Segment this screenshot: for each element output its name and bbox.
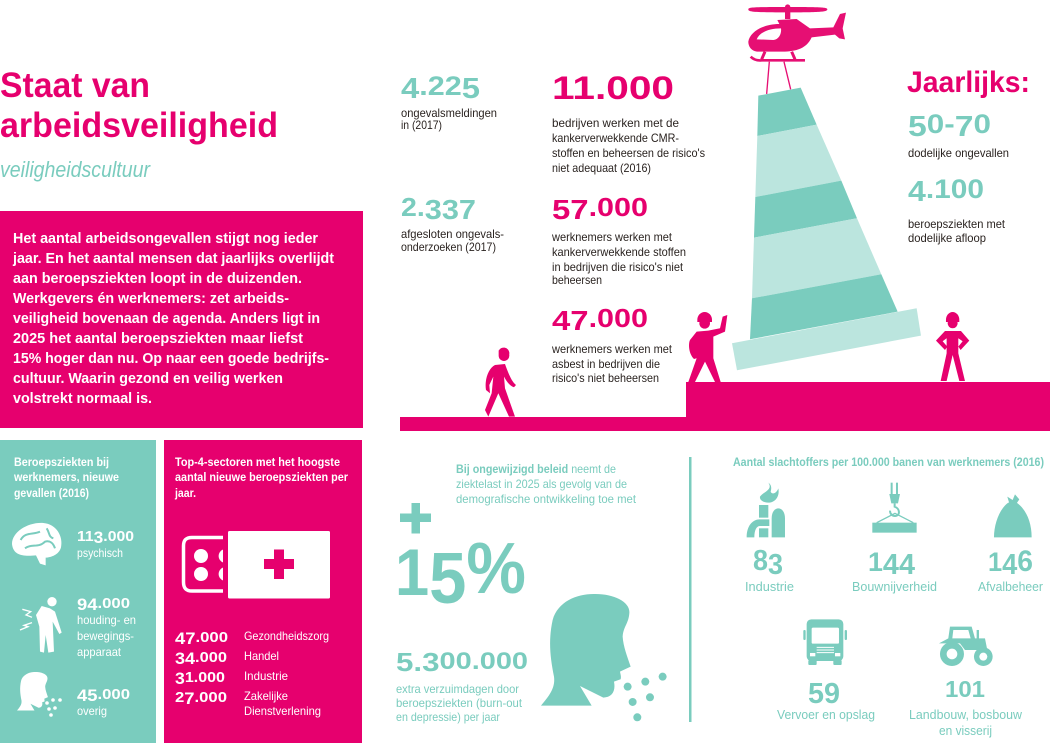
stat: houding- en bewegingsapparaat: .000 bbox=[97, 595, 130, 612]
stat: industrie: Industrie bbox=[745, 579, 794, 594]
icon: crane hook bbox=[872, 483, 917, 533]
stat: 11.000 bedrijven: 11.000 bbox=[552, 70, 674, 106]
stat: 57.000 werknemers: .000 bbox=[589, 192, 648, 222]
stat: verzuimdagen: 00.000 bbox=[440, 648, 528, 675]
introduction text: 15% hoger dan nu. Op naar een goede bedrijfs- bbox=[13, 351, 329, 367]
cone body bbox=[732, 88, 921, 370]
stat: industrie: 8 bbox=[753, 545, 769, 577]
text: unchanged policy intro: demografische ontwikkeling toe met bbox=[456, 492, 637, 506]
stat: ongevalsmeldingen: ongevalsmeldingen bbox=[401, 106, 497, 120]
stat: verzuimdagen: en depressie) per jaar bbox=[396, 710, 500, 724]
stat: psychisch: 3 bbox=[94, 529, 103, 547]
panel heading: gevallen (2016) bbox=[14, 486, 89, 500]
panel: introduction bbox=[0, 211, 363, 428]
stat: verzuimdagen: extra verzuimdagen door bbox=[396, 682, 519, 696]
panel heading: Beroepsziekten bij bbox=[14, 455, 109, 469]
panel heading: Top-4-sectoren met het hoogste bbox=[175, 455, 340, 469]
stat: vervoer en opslag bbox=[777, 619, 875, 722]
icon: coughing head large bbox=[541, 594, 667, 721]
icon: brain bbox=[12, 523, 61, 565]
stat: houding- en bewegingsapparaat bbox=[77, 595, 136, 659]
stat: industrie: 3 bbox=[768, 549, 783, 581]
stat: 57.000 werknemers: in bedrijven die risico's niet bbox=[552, 260, 684, 274]
icon: coughing head bbox=[17, 672, 62, 717]
stat: plus 15 percent: % bbox=[466, 529, 526, 609]
stat: psychisch bbox=[77, 528, 134, 560]
sector list bbox=[175, 629, 329, 718]
stat: ongevalsmeldingen: in (2017) bbox=[401, 118, 442, 132]
sector list: .000 bbox=[195, 689, 227, 706]
stat: plus 15 percent: 1 bbox=[395, 535, 432, 609]
stat: 57.000 werknemers bbox=[551, 192, 686, 287]
heading: Jaarlijks: Jaarlijks: bbox=[907, 66, 1030, 99]
title: arbeidsveiligheid bbox=[0, 106, 278, 145]
stat: 47.000 werknemers: .000 bbox=[589, 303, 648, 333]
stat: overig bbox=[77, 686, 130, 718]
stat: ongevalsonderzoeken bbox=[401, 192, 504, 254]
stat: 57.000 werknemers: beheersen bbox=[552, 273, 602, 287]
stat: ongevalsonderzoeken: 337 bbox=[425, 194, 476, 225]
stat: verzuimdagen bbox=[396, 647, 528, 724]
stat: dodelijke ongevallen: 5 bbox=[908, 111, 927, 143]
stat: psychisch: 11 bbox=[77, 528, 93, 545]
stat: industrie bbox=[745, 483, 794, 594]
subtitle: veiligheidscultuur bbox=[0, 157, 151, 182]
introduction text: Het aantal arbeidsongevallen stijgt nog ieder bbox=[13, 231, 318, 247]
sector list: Dienstverlening bbox=[244, 704, 321, 718]
title bbox=[0, 66, 278, 145]
stat: houding- en bewegingsapparaat: apparaat bbox=[77, 645, 122, 659]
stat: bouwnijverheid: 1 bbox=[868, 547, 883, 577]
stat: plus 15 percent: 5 bbox=[429, 539, 466, 619]
stat: 47.000 werknemers: 47 bbox=[552, 305, 589, 336]
icon: helicopter bbox=[748, 4, 846, 94]
stat: ongevalsmeldingen: 5 bbox=[462, 73, 480, 105]
ground with step bbox=[400, 382, 1050, 431]
stat: 11.000 bedrijven: stoffen en beheersen de risico's bbox=[552, 146, 705, 160]
stat: landbouw: en visserij bbox=[939, 723, 992, 738]
icon: factory bbox=[747, 483, 785, 537]
stat: dodelijke ongevallen: 0- bbox=[927, 109, 955, 139]
stat: dodelijke ongevallen: dodelijke ongevallen bbox=[908, 146, 1009, 160]
stat: psychisch: psychisch bbox=[77, 546, 123, 560]
stat: afvalbeheer: 4 bbox=[1002, 549, 1017, 581]
text: unchanged policy intro bbox=[456, 462, 637, 506]
stat: 11.000 bedrijven: bedrijven werken met de bbox=[552, 116, 679, 130]
stat: ongevalsmeldingen: .22 bbox=[419, 71, 462, 101]
stat: beroepsziekten met dodelijke afloop: beroepsziekten met bbox=[908, 217, 1006, 231]
stat: houding- en bewegingsapparaat: 94 bbox=[77, 596, 98, 614]
panel heading: jaar. bbox=[174, 486, 196, 500]
introduction text: 2025 het aantal beroepsziekten maar liefst bbox=[13, 331, 303, 347]
icon: plus sign bbox=[400, 503, 431, 534]
stat: 11.000 bedrijven: niet adequaat (2016) bbox=[552, 161, 651, 175]
stat: overig: 45 bbox=[77, 687, 97, 705]
panel heading: werknemers, nieuwe bbox=[13, 470, 119, 484]
stat: vervoer en opslag: 59 bbox=[808, 678, 840, 710]
stat: 57.000 werknemers: kankerverwekkende stoffen bbox=[552, 245, 686, 259]
panel heading bbox=[174, 455, 348, 500]
stat: afvalbeheer: 1 bbox=[988, 547, 1003, 577]
stat: houding- en bewegingsapparaat: bewegings- bbox=[77, 629, 134, 643]
stat: beroepsziekten met dodelijke afloop: 4 bbox=[908, 176, 926, 208]
stat: 47.000 werknemers: werknemers werken met bbox=[551, 342, 673, 356]
stat: ongevalsonderzoeken: onderzoeken (2017) bbox=[401, 240, 496, 254]
stat: afvalbeheer bbox=[978, 494, 1044, 594]
stat: beroepsziekten met dodelijke afloop: dodelijke afloop bbox=[908, 231, 986, 245]
icon: medicine blister pack bbox=[184, 531, 330, 598]
icon: standing worker bbox=[936, 312, 969, 381]
illustration: traffic cone lifted by helicopter bbox=[688, 4, 969, 382]
introduction text: jaar. En het aantal mensen dat jaarlijks overlijdt bbox=[12, 251, 334, 267]
stat: vervoer en opslag: Vervoer en opslag bbox=[777, 707, 875, 722]
sector list: Industrie bbox=[244, 669, 288, 683]
stat: psychisch: .000 bbox=[103, 528, 134, 545]
text: unchanged policy intro: Bij ongewijzigd beleid neemt de bbox=[456, 462, 616, 476]
stat: ongevalsmeldingen: 4 bbox=[401, 73, 419, 105]
stat: landbouw: Landbouw, bosbouw bbox=[909, 707, 1023, 722]
stat: overig: .000 bbox=[97, 686, 130, 703]
stat: overig: overig bbox=[77, 704, 107, 718]
introduction text: cultuur. Waarin gezond en veilig werken bbox=[13, 371, 283, 387]
panel: occupational diseases bbox=[0, 440, 156, 743]
introduction text: aan beroepsziekten loopt in de duizenden. bbox=[13, 271, 302, 287]
stat: verzuimdagen: 5.3 bbox=[396, 647, 440, 677]
introduction text: Werkgevers én werknemers: zet arbeids- bbox=[13, 291, 289, 307]
icon: truck bbox=[803, 619, 847, 665]
text: unchanged policy intro: ziektelast in 2025 als gevolg van de bbox=[456, 477, 627, 491]
stat: 47.000 werknemers: asbest in bedrijven die bbox=[552, 357, 660, 371]
stat: landbouw bbox=[909, 627, 1023, 738]
sector list: 1.000 bbox=[185, 669, 225, 686]
stat: bouwnijverheid: 44 bbox=[883, 549, 915, 581]
stat: bouwnijverheid bbox=[852, 483, 937, 594]
stat: 57.000 werknemers: werknemers werken met bbox=[551, 230, 673, 244]
sector list: 2 bbox=[175, 689, 183, 706]
stat: dodelijke ongevallen bbox=[908, 109, 1009, 160]
icon: waving worker bbox=[688, 312, 727, 382]
panel: top 4 sectors bbox=[164, 440, 362, 743]
stat: ongevalsonderzoeken: afgesloten ongevals- bbox=[401, 227, 504, 241]
icon: tractor bbox=[939, 627, 993, 666]
panel heading bbox=[13, 455, 119, 500]
introduction text bbox=[12, 231, 334, 407]
sector list: Zakelijke bbox=[244, 689, 288, 703]
stat: ongevalsmeldingen bbox=[401, 71, 497, 132]
sector list: Handel bbox=[244, 649, 279, 663]
icon: garbage bag bbox=[994, 494, 1032, 537]
stat: beroepsziekten met dodelijke afloop bbox=[908, 174, 1006, 245]
sector list: 7 bbox=[184, 690, 195, 708]
stat: 47.000 werknemers: risico's niet beheersen bbox=[552, 371, 659, 385]
panel heading: aantal nieuwe beroepsziekten per bbox=[175, 470, 348, 484]
stat: ongevalsonderzoeken: 2. bbox=[401, 192, 423, 222]
title: Staat van bbox=[0, 66, 150, 105]
stat: beroepsziekten met dodelijke afloop: .100 bbox=[926, 174, 984, 204]
stat: 11.000 bedrijven bbox=[552, 70, 705, 175]
sector list: 47 bbox=[175, 630, 195, 648]
stat: landbouw: 101 bbox=[945, 676, 985, 702]
sector list: .000 bbox=[195, 629, 228, 646]
introduction text: veiligheid bovenaan de agenda. Anders ligt in bbox=[13, 311, 320, 327]
stat: dodelijke ongevallen: 0 bbox=[974, 109, 991, 139]
sector list: Gezondheidszorg bbox=[244, 629, 329, 643]
stat: 47.000 werknemers bbox=[551, 303, 673, 385]
stat: dodelijke ongevallen: 7 bbox=[955, 111, 974, 143]
stat: houding- en bewegingsapparaat: houding- en bbox=[77, 613, 136, 627]
stat: 57.000 werknemers: 57 bbox=[552, 194, 589, 225]
stat: verzuimdagen: beroepsziekten (burn-out bbox=[396, 696, 523, 710]
stat: afvalbeheer: Afvalbeheer bbox=[978, 579, 1044, 594]
icon: person with back pain bbox=[20, 597, 62, 653]
icon: walking worker bbox=[485, 348, 516, 417]
stat: 11.000 bedrijven: kankerverwekkende CMR- bbox=[552, 131, 679, 145]
sector list: 3 bbox=[175, 670, 185, 688]
stat: afvalbeheer: 6 bbox=[1017, 545, 1033, 578]
sector list: 34 bbox=[175, 650, 196, 668]
sector list: .000 bbox=[195, 649, 227, 666]
stat: bouwnijverheid: Bouwnijverheid bbox=[852, 579, 937, 594]
introduction text: volstrekt normaal is. bbox=[13, 391, 152, 407]
